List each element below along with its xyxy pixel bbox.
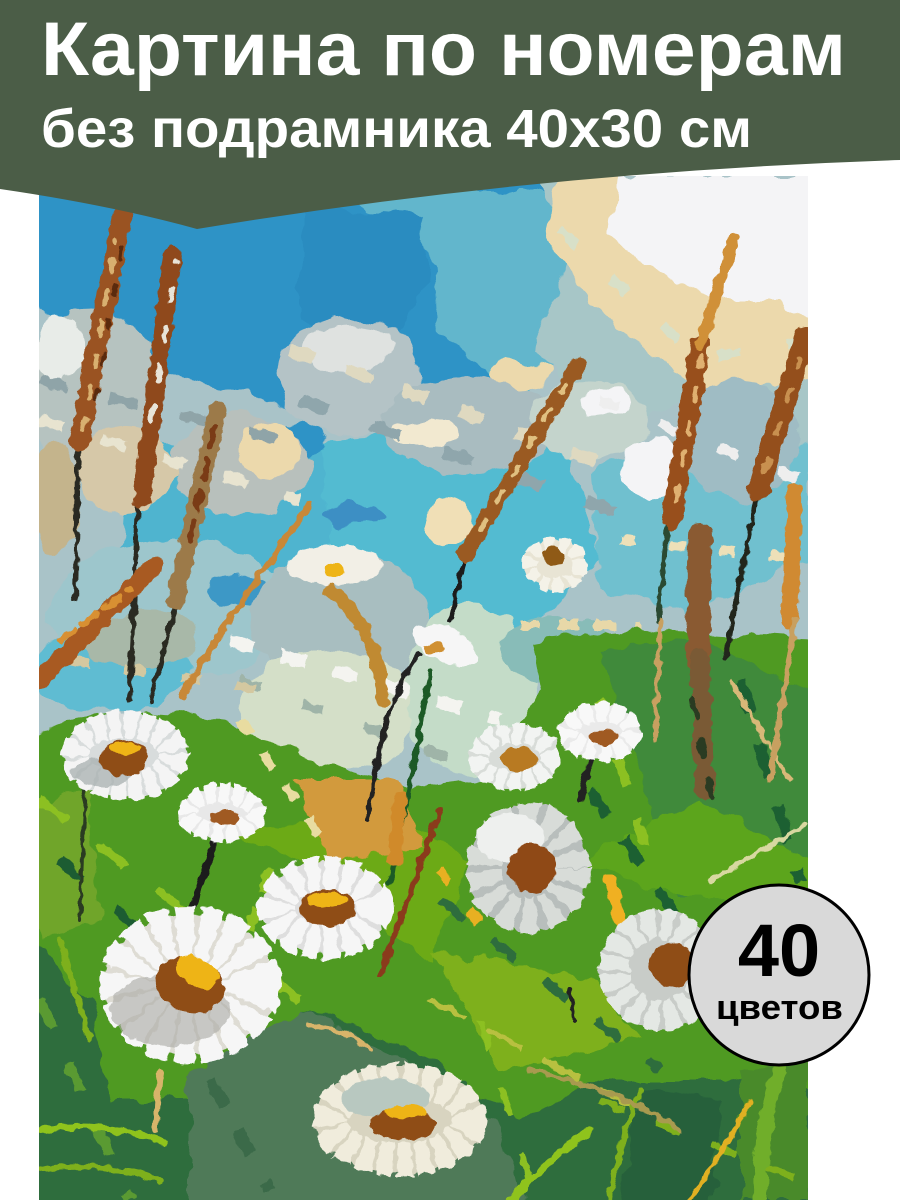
grass blades (40, 655, 805, 1200)
daisy: center (261, 862, 389, 954)
clouds (20, 176, 830, 775)
daisy: small left (178, 787, 266, 839)
cloud mottling (40, 230, 810, 770)
badge: 40 colours: 40 (738, 909, 820, 992)
subtitle: без подрамника 40х30 см (41, 99, 752, 159)
daisy: mid right (468, 804, 588, 932)
daisy: bottom (314, 1066, 486, 1174)
daisy: small center right (469, 725, 561, 789)
wheat stalks (40, 215, 805, 800)
badge: 40 colours: цветов (716, 989, 843, 1027)
daisy: right small (559, 704, 641, 760)
painting: meadow with daisies and wheat (20, 160, 830, 1200)
badge: 40 colours (689, 885, 869, 1065)
title: Картина по номерам (41, 7, 846, 92)
daisy: far flower (523, 540, 587, 590)
daisy: pale flower (287, 545, 383, 585)
header banner (0, 0, 900, 229)
daisy: behind badge (596, 908, 700, 1032)
daisy: sky flower (412, 624, 478, 668)
daisy: large left (104, 915, 276, 1055)
daisy: upper left (63, 713, 187, 797)
grass (20, 630, 830, 1200)
sky (20, 160, 830, 800)
grass mottling (40, 680, 800, 1200)
daisies (63, 540, 720, 1174)
